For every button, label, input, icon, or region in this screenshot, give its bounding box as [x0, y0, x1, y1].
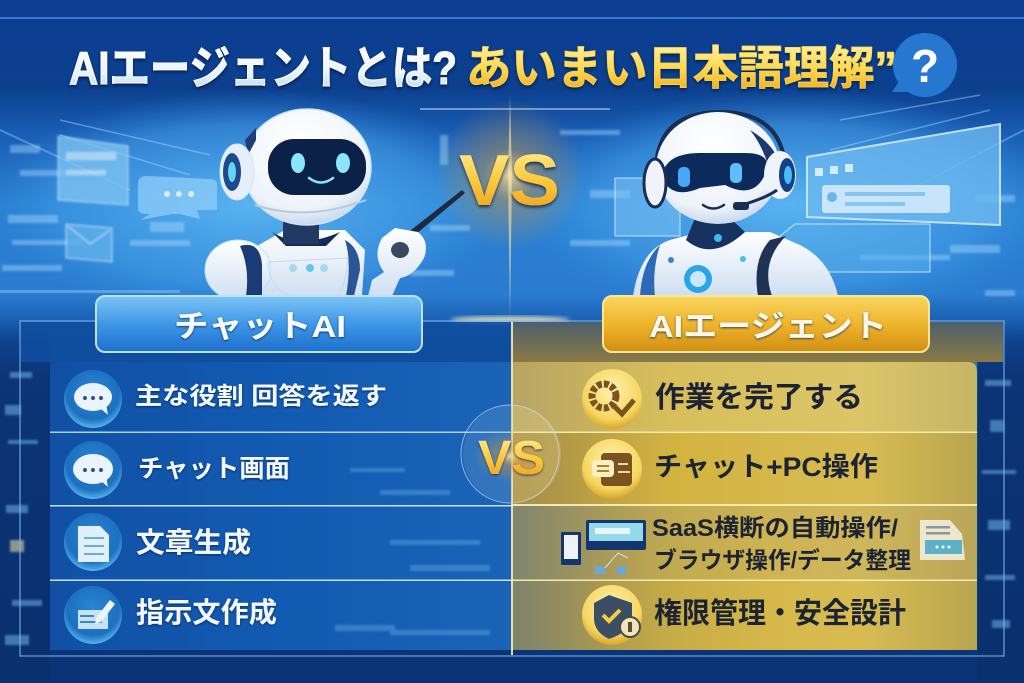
- title: white part: AIエージェントとは?: [69, 42, 457, 94]
- row: complete tasks: [582, 369, 863, 429]
- pill heading: chat AI: チャットAI: [174, 309, 346, 344]
- robot body: [205, 222, 365, 300]
- robot: chat AI: [205, 109, 465, 300]
- row: SaaS operation: [561, 515, 965, 574]
- row: permissions: [582, 585, 906, 645]
- panel: chat AI rows: [50, 362, 512, 650]
- row: main role: 主な役割 回答を返す: [135, 383, 387, 410]
- robot body: [633, 218, 838, 296]
- robot head: [220, 109, 371, 225]
- row: SaaS operation: ブラウザ操作/データ整理: [654, 547, 911, 573]
- row: text generation: 文章生成: [136, 527, 251, 558]
- row: chat screen: チャット画面: [138, 455, 290, 483]
- row: main role: [64, 370, 387, 428]
- panel background left: [50, 362, 512, 650]
- panel background right: [512, 362, 977, 650]
- icon: document card: [920, 520, 965, 560]
- robot: AI agent: [633, 112, 838, 296]
- icon: devices: [561, 520, 646, 574]
- row: prompt writing: 指示文作成: [136, 597, 277, 628]
- panel: AI agent rows: [512, 362, 977, 650]
- row: chat screen: [64, 441, 290, 499]
- icon: question speech bubble: ?: [911, 40, 939, 92]
- title: [69, 42, 897, 94]
- center divider: [511, 322, 513, 655]
- row: chat plus PC: [582, 439, 878, 499]
- row: prompt writing: [64, 586, 277, 644]
- VS large: VS: [459, 141, 560, 221]
- pill heading: AI agent: [603, 296, 929, 352]
- robot head with headset: [644, 112, 796, 224]
- center sparkle behind VS: [435, 95, 585, 324]
- icon: question speech bubble: [892, 33, 957, 97]
- row: chat plus PC: チャット+PC操作: [654, 452, 878, 482]
- chat bubble decoration: [138, 176, 217, 220]
- row: complete tasks: 作業を完了する: [655, 381, 863, 414]
- VS circle badge: [461, 405, 561, 503]
- VS circle badge: VS: [478, 432, 545, 485]
- pill heading: chat AI: [96, 296, 422, 352]
- panel: outer frame: [20, 321, 1004, 656]
- floating screen panel right: [615, 124, 1000, 272]
- row: text generation: [64, 513, 251, 571]
- floating screen panel left: [58, 136, 128, 262]
- pill heading: AI agent: AIエージェント: [649, 309, 887, 344]
- row: SaaS operation: SaaS横断の自動操作/: [652, 515, 898, 542]
- row: permissions: 権限管理・安全設計: [654, 597, 906, 630]
- robot hand with pointer: [368, 190, 465, 296]
- title: gold part: あいまい日本語理解”: [466, 42, 897, 94]
